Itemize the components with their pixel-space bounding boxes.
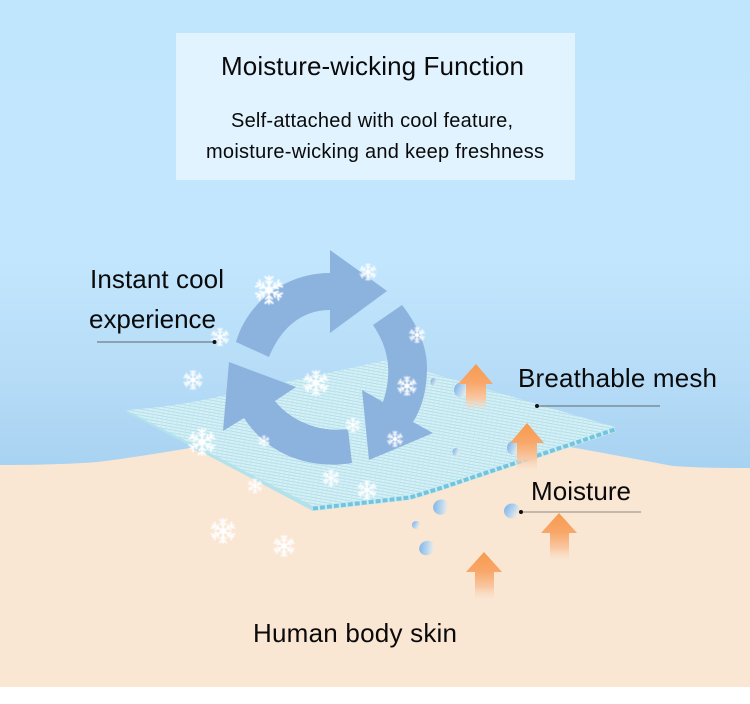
sky background <box>0 0 750 470</box>
title panel <box>176 33 575 180</box>
snowflakes <box>184 264 425 556</box>
arrow: right <box>362 305 433 460</box>
label: instant cool experience: experience <box>89 304 216 334</box>
orange arrows <box>458 364 577 599</box>
skin area <box>0 447 750 687</box>
label: breathable mesh <box>518 363 717 408</box>
moisture droplets <box>412 378 520 558</box>
title panel: moisture-wicking and keep freshness <box>206 141 544 163</box>
arrow: top <box>236 250 387 357</box>
cycle arrows <box>223 250 433 465</box>
label: breathable mesh: Breathable mesh <box>518 363 717 393</box>
label: moisture: Moisture <box>531 476 631 506</box>
subtitle: Self-attached with cool feature, <box>231 110 513 132</box>
title: Moisture-wicking Function <box>221 51 524 81</box>
label: instant cool experience <box>89 264 224 344</box>
label: instant cool experience: Instant cool <box>90 264 224 294</box>
label: human body skin: Human body skin <box>253 618 457 648</box>
arrow: bottom left <box>223 362 352 465</box>
label: moisture <box>519 476 641 514</box>
breathable mesh sheet <box>126 360 615 511</box>
